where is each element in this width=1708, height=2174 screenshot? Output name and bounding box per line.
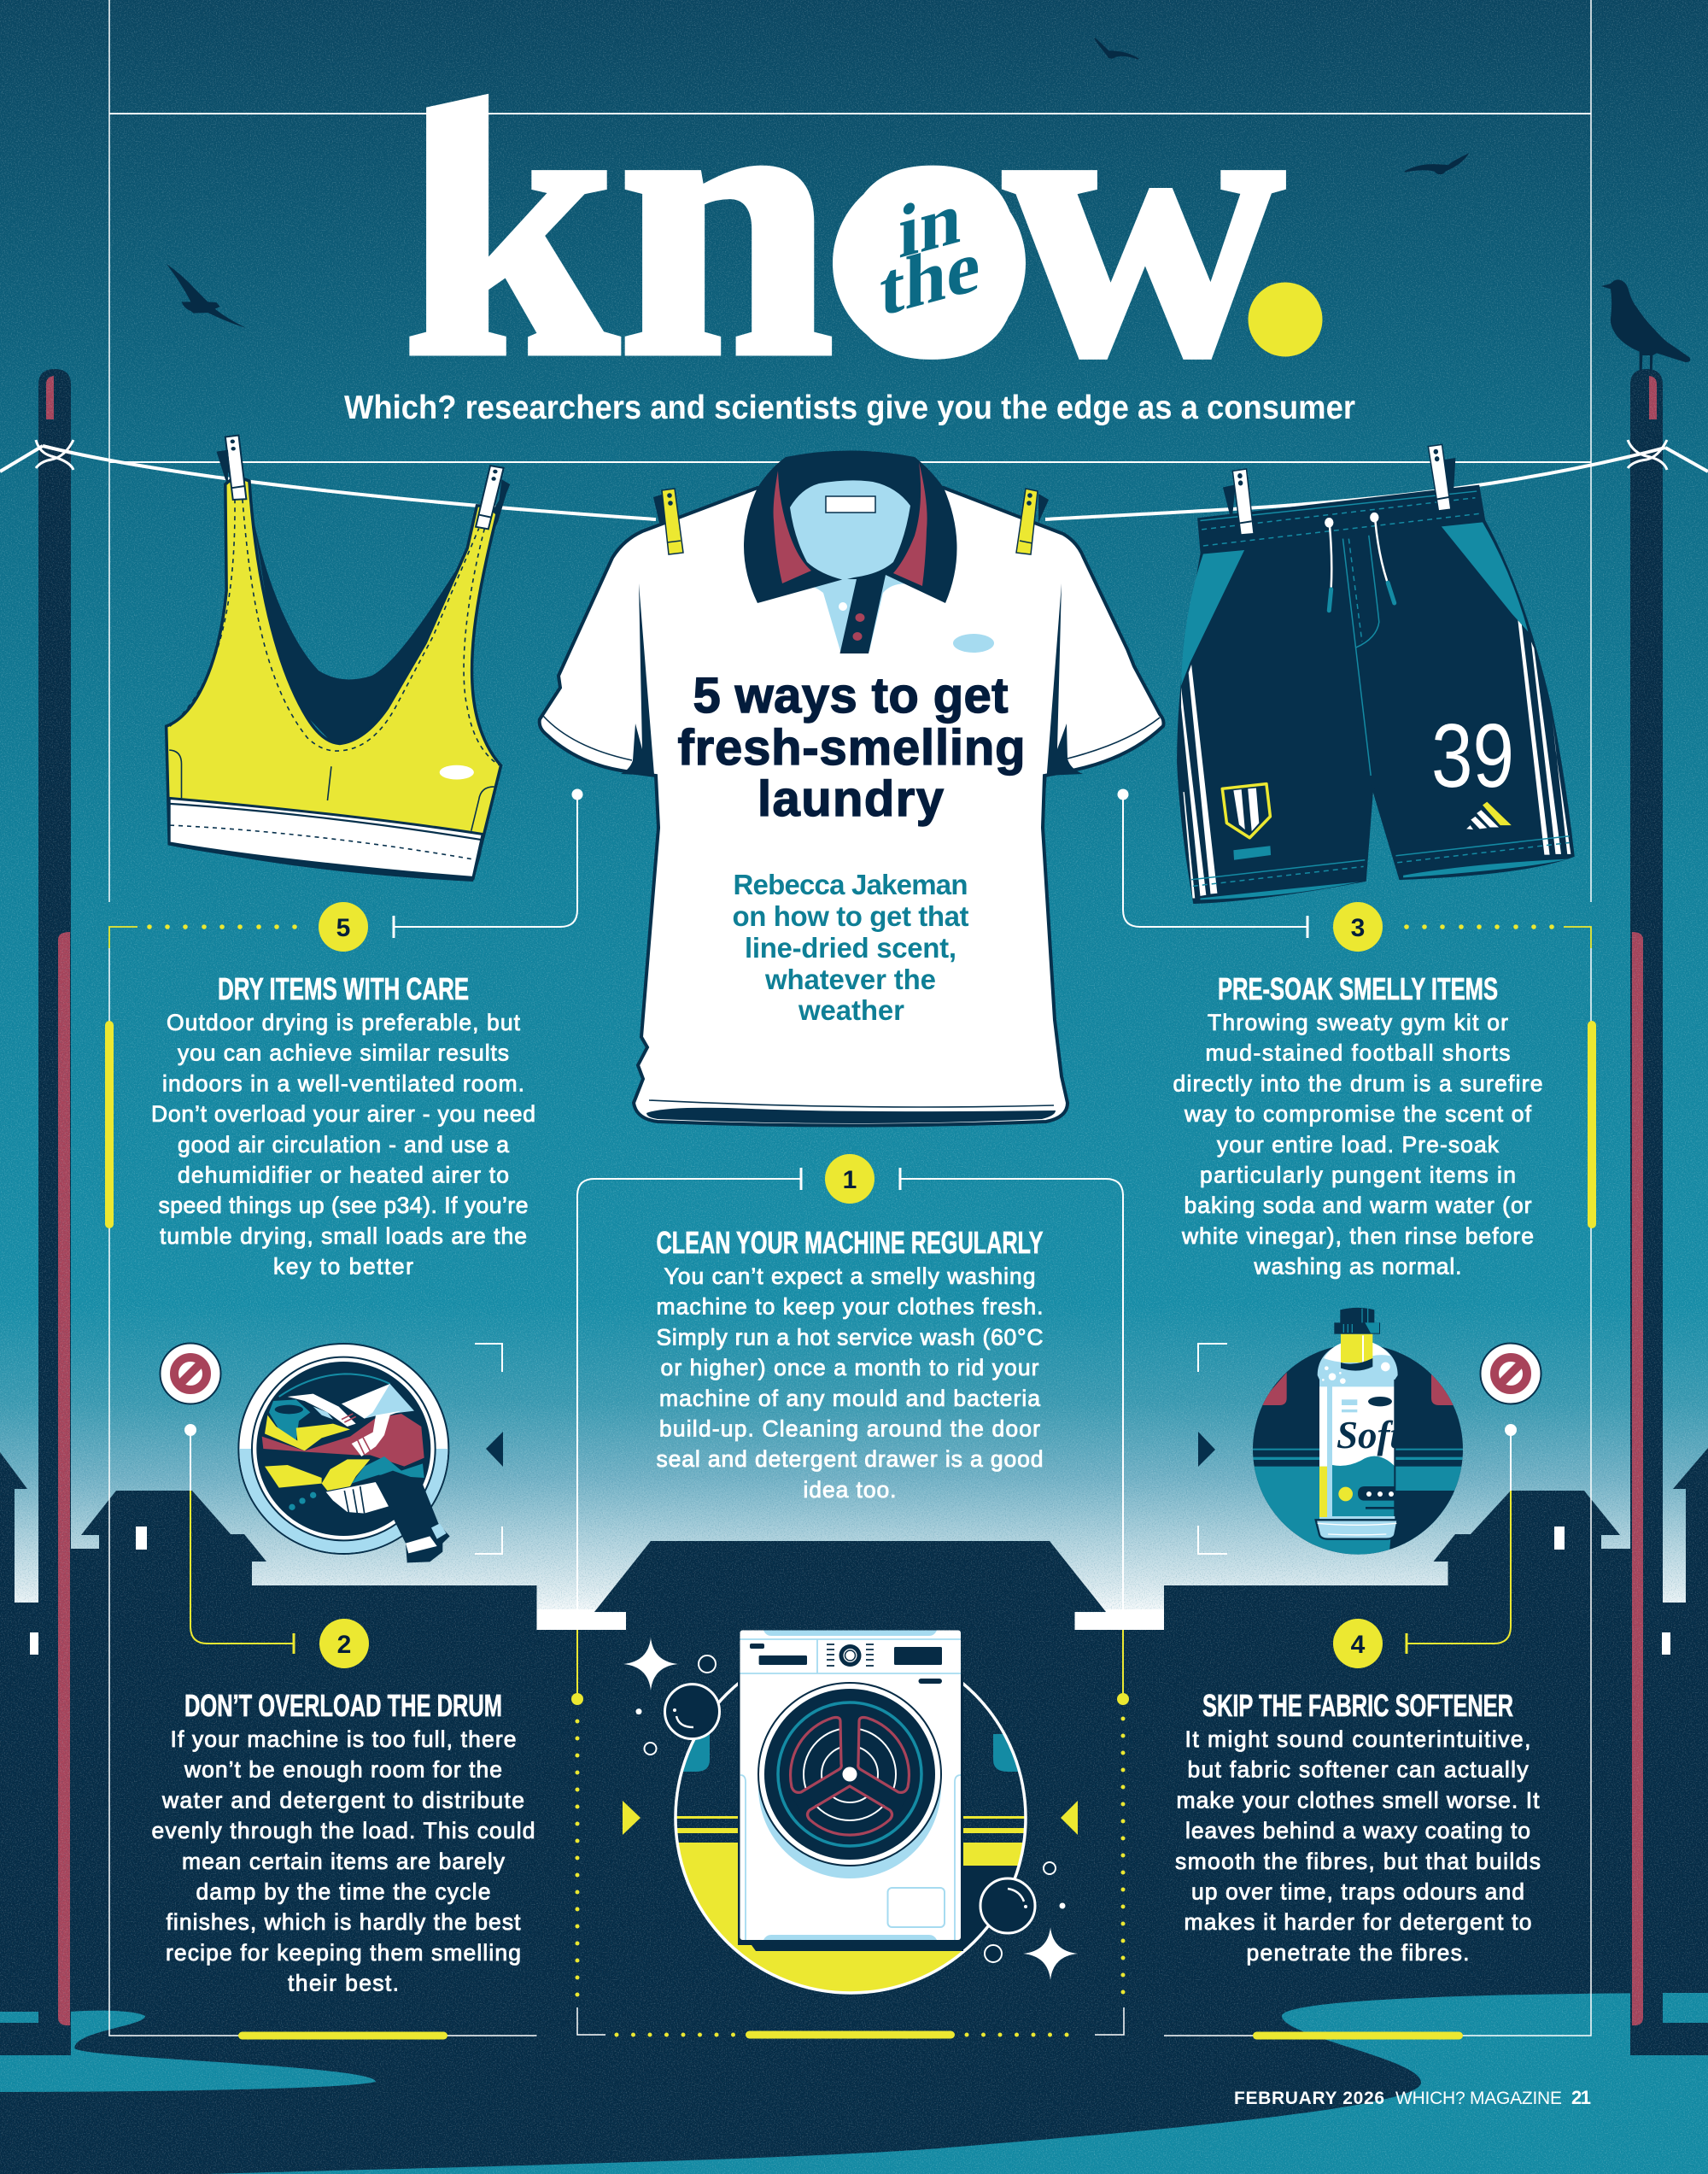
panel 3 connector xyxy=(1117,789,1591,948)
panel 5: dry items with care: speed things up (see p34). If you’re xyxy=(159,1192,528,1218)
panel 3: pre-soak smelly items: your entire load. Pre-soak xyxy=(1217,1132,1500,1157)
drum paddles xyxy=(791,1717,909,1835)
panel 3: pre-soak smelly items: white vinegar), then rinse before xyxy=(1181,1223,1534,1249)
right pole xyxy=(1630,369,1708,2055)
panel 3: pre-soak smelly items: mud-stained football shorts xyxy=(1206,1040,1510,1066)
in the: in xyxy=(898,175,961,275)
title: know: know xyxy=(402,7,1284,437)
shorts body xyxy=(1179,486,1573,902)
machine blue trim xyxy=(763,1630,937,1940)
panel 1: clean your machine regularly: seal and detergent drawer is a good xyxy=(656,1446,1044,1472)
panel 3: pre-soak smelly items xyxy=(1173,971,1542,1280)
panel 2: don't overload the drum: evenly through the load. This could xyxy=(152,1818,535,1843)
top stitching xyxy=(168,499,500,859)
peg right xyxy=(476,466,504,529)
shirt stain xyxy=(953,634,994,653)
triangle right panel xyxy=(1198,1432,1215,1467)
label marks xyxy=(1342,1399,1357,1412)
top highlight xyxy=(440,765,474,780)
byline: whatever the xyxy=(764,964,936,995)
in the: the xyxy=(880,223,980,333)
light blue placket backing xyxy=(773,547,931,651)
panel 2: don't overload the drum xyxy=(152,1688,535,1996)
panel 4 connector xyxy=(1407,1424,1517,1654)
panel 1: clean your machine regularly xyxy=(656,1225,1044,1503)
panel 5: dry items with care: indoors in a well-ventilated room. xyxy=(162,1070,524,1096)
title: know xyxy=(409,94,1322,360)
line knots xyxy=(36,440,1667,470)
door xyxy=(758,1683,941,1878)
yellow accent bars xyxy=(105,1021,1596,2040)
brackets around drum xyxy=(475,1344,502,1554)
white o disc xyxy=(833,169,1026,357)
byline: line-dried scent, xyxy=(745,932,956,964)
yellow triangles xyxy=(623,1801,1078,1835)
panel 5: dry items with care: Don’t overload your airer - you need xyxy=(151,1101,535,1127)
byline: Rebecca Jakeman xyxy=(733,869,968,900)
bird right xyxy=(1405,155,1467,173)
shirt peg shadows xyxy=(653,494,1049,523)
drum arcs xyxy=(804,1728,896,1820)
detergent drawer outline xyxy=(888,1888,945,1927)
panel 4: skip the fabric softener: SKIP THE FABRIC SOFTENER xyxy=(1202,1688,1513,1723)
number badge 5: 5 xyxy=(336,914,350,942)
triangle left panel xyxy=(486,1432,503,1467)
panel 5: dry items with care: DRY ITEMS WITH CARE xyxy=(218,971,469,1006)
panel 2: don't overload the drum: recipe for keeping them smelling xyxy=(166,1940,521,1966)
collar red trim xyxy=(774,462,927,586)
water reflections xyxy=(0,1993,1708,2174)
shirt body xyxy=(540,488,1163,1126)
crest bar xyxy=(1233,846,1271,860)
number badge 1 xyxy=(825,1154,874,1204)
left pole xyxy=(0,369,71,2055)
no sign left xyxy=(161,1343,220,1404)
panel 4: skip the fabric softener: penetrate the fibres. xyxy=(1247,1940,1469,1966)
bird left xyxy=(167,264,246,328)
escaping sock xyxy=(373,1471,450,1562)
panel 3: pre-soak smelly items: way to compromise the scent of xyxy=(1184,1101,1532,1127)
panel 4: skip the fabric softener xyxy=(1175,1688,1541,1966)
control panel xyxy=(750,1644,942,1684)
clothes line xyxy=(0,440,1708,519)
shirt heading: laundry xyxy=(757,771,944,827)
sleeve hem lines xyxy=(543,716,1160,1107)
panel 5: dry items with care xyxy=(151,971,535,1280)
panel 3: pre-soak smelly items: particularly pungent items in xyxy=(1200,1162,1516,1187)
footer xyxy=(1234,2087,1591,2108)
panel 2: don't overload the drum: damp by the time the cycle xyxy=(196,1879,490,1905)
byline: weather xyxy=(798,994,904,1026)
bird top xyxy=(1095,38,1138,59)
panel 1: clean your machine regularly: You can’t expect a smelly washing xyxy=(664,1263,1035,1289)
top shadows xyxy=(169,450,509,882)
drum outer ring xyxy=(238,1344,448,1554)
panel 4: skip the fabric softener: make your clothes smell worse. It xyxy=(1177,1787,1540,1813)
overloaded drum illustration xyxy=(238,1344,450,1562)
panel 1: clean your machine regularly: CLEAN YOUR MACHINE REGULARLY xyxy=(656,1225,1044,1260)
shirt bottom hem xyxy=(646,1108,1056,1123)
panel 3: pre-soak smelly items: directly into the drum is a surefire xyxy=(1173,1070,1542,1096)
panel 5: dry items with care: good air circulation - and use a xyxy=(178,1132,509,1157)
peg left xyxy=(225,436,246,500)
white band xyxy=(169,798,483,877)
panel 3: pre-soak smelly items: baking soda and warm water (or xyxy=(1184,1192,1532,1218)
panel 4: skip the fabric softener: leaves behind a waxy coating to xyxy=(1185,1818,1530,1843)
number badge 4: 4 xyxy=(1351,1631,1366,1659)
number badge 4 xyxy=(1333,1619,1383,1668)
Soft brand: Soft xyxy=(1337,1414,1401,1456)
bubble highlights xyxy=(635,1708,1066,1908)
armpit shadows xyxy=(621,583,1083,828)
machine backdrop circle xyxy=(666,1734,1033,1996)
panel 3: pre-soak smelly items: washing as normal. xyxy=(1254,1254,1462,1280)
panel 4: skip the fabric softener: It might sound counterintuitive, xyxy=(1185,1726,1530,1752)
clean white gaps xyxy=(536,1609,1164,1630)
neck label xyxy=(826,496,875,513)
panel 4: skip the fabric softener: smooth the fibres, but that builds xyxy=(1175,1849,1541,1874)
teal stitching xyxy=(1191,491,1570,886)
panel 2: don't overload the drum: mean certain items are barely xyxy=(182,1849,506,1874)
panel 2: don't overload the drum: If your machine is too full, there xyxy=(171,1726,516,1752)
panel 1: clean your machine regularly: idea too. xyxy=(803,1477,897,1503)
panel 2 connector xyxy=(184,1424,294,1654)
town skyline and ground xyxy=(0,1448,1708,2174)
shirt heading: fresh-smelling xyxy=(678,720,1025,776)
label xyxy=(1332,1386,1395,1467)
birds xyxy=(167,38,1690,371)
softener bottle illustration xyxy=(1247,1308,1469,1557)
number badge 3 xyxy=(1333,902,1383,952)
shirt heading xyxy=(678,668,1025,827)
teal dots xyxy=(289,1492,316,1510)
panel 2: don't overload the drum: finishes, which is hardly the best xyxy=(166,1909,521,1935)
in the xyxy=(880,175,980,333)
bubbles xyxy=(1322,1362,1390,1384)
bottle disc xyxy=(1253,1345,1463,1555)
socks and sleeves xyxy=(288,1394,356,1427)
bottle base xyxy=(1316,1520,1398,1539)
no sign right xyxy=(1481,1343,1541,1404)
panel 4: skip the fabric softener: up over time, traps odours and xyxy=(1191,1879,1524,1905)
byline: on how to get that xyxy=(733,900,968,932)
machine shadow xyxy=(738,1674,963,1951)
bottle body xyxy=(1318,1343,1398,1519)
draw cords xyxy=(1330,521,1387,588)
polo shirt illustration xyxy=(540,451,1163,1126)
collar xyxy=(744,451,957,653)
panel 5: dry items with care: Outdoor drying is preferable, but xyxy=(167,1010,521,1035)
shirt heading: 5 ways to get xyxy=(693,668,1008,724)
kit logo xyxy=(1466,802,1512,829)
byline xyxy=(733,869,968,1026)
panel 5 connector xyxy=(109,789,582,948)
machine cabinet xyxy=(740,1630,961,1940)
number badge 1: 1 xyxy=(843,1166,857,1194)
panel 1: clean your machine regularly: build-up. Cleaning around the door xyxy=(659,1416,1040,1442)
footer: WHICH? MAGAZINE xyxy=(1395,2089,1562,2108)
panel 1 lower dotted frame xyxy=(571,1630,1129,2035)
sports top illustration xyxy=(167,436,510,882)
panel 4: skip the fabric softener: makes it harder for detergent to xyxy=(1184,1909,1532,1935)
yellow full stop xyxy=(1249,282,1322,357)
short pegs xyxy=(1232,444,1451,535)
football shorts illustration xyxy=(1179,444,1573,902)
top body xyxy=(167,478,501,878)
subtitle: Which? researchers and scientists give you the edge as a consumer xyxy=(344,390,1355,426)
panel 1: clean your machine regularly: Simply run a hot service wash (60°C xyxy=(656,1324,1044,1350)
yellow pegs xyxy=(662,489,1038,554)
footer: 21 xyxy=(1571,2087,1591,2108)
number badge 3: 3 xyxy=(1351,914,1365,942)
number badge 2: 2 xyxy=(337,1631,351,1659)
drum contents xyxy=(262,1374,424,1491)
panel 2: don't overload the drum: water and detergent to distribute xyxy=(161,1787,524,1813)
white side stripes xyxy=(1181,620,1571,899)
panel 1: clean your machine regularly: machine to keep your clothes fresh. xyxy=(656,1294,1044,1320)
collar inner xyxy=(790,480,910,580)
poles xyxy=(0,369,1708,2055)
bottle strip xyxy=(1319,1386,1327,1467)
teal side panels xyxy=(1181,522,1568,899)
panel 3: pre-soak smelly items: Throwing sweaty gym kit or xyxy=(1208,1010,1508,1035)
number badge 5 xyxy=(319,902,368,952)
panel 5: dry items with care: dehumidifier or heated airer to xyxy=(178,1162,509,1187)
sparkles xyxy=(623,1638,1078,1980)
buttons xyxy=(839,602,864,641)
peg shadows xyxy=(1223,458,1455,514)
shorts number: 39 xyxy=(1431,706,1514,806)
panel 2: don't overload the drum: their best. xyxy=(288,1971,399,1996)
panel 2: don't overload the drum: won’t be enough room for the xyxy=(184,1757,502,1783)
panel 1 connector xyxy=(577,1168,1123,1630)
bottle cap xyxy=(1334,1308,1380,1334)
perched bird xyxy=(1601,279,1690,371)
panel 5: dry items with care: you can achieve similar results xyxy=(178,1040,509,1066)
pole red stripes xyxy=(46,376,1657,2025)
bottle edge xyxy=(1392,1380,1397,1516)
panel 3: pre-soak smelly items: PRE-SOAK SMELLY ITEMS xyxy=(1218,971,1498,1006)
panel 5: dry items with care: tumble drying, small loads are the xyxy=(160,1223,527,1249)
panel 1: clean your machine regularly: machine of any mould and bacteria xyxy=(659,1386,1040,1411)
washing machine illustration xyxy=(623,1630,1078,1996)
panel 4: skip the fabric softener: but fabric softener can actually xyxy=(1187,1757,1529,1783)
panel 1: clean your machine regularly: or higher) once a month to rid your xyxy=(661,1355,1039,1380)
brackets around bottle xyxy=(1198,1344,1227,1554)
number badge 2 xyxy=(319,1619,369,1668)
building windows xyxy=(30,1526,1670,1655)
crest xyxy=(1222,784,1270,838)
panel 5: dry items with care: key to better xyxy=(273,1254,413,1280)
label dots xyxy=(1338,1487,1353,1501)
footer: FEBRUARY 2026 xyxy=(1234,2089,1384,2108)
bubbles xyxy=(644,1655,1056,1962)
panel 2: don't overload the drum: DON’T OVERLOAD THE DRUM xyxy=(184,1688,502,1723)
bottle neck xyxy=(1341,1334,1372,1362)
